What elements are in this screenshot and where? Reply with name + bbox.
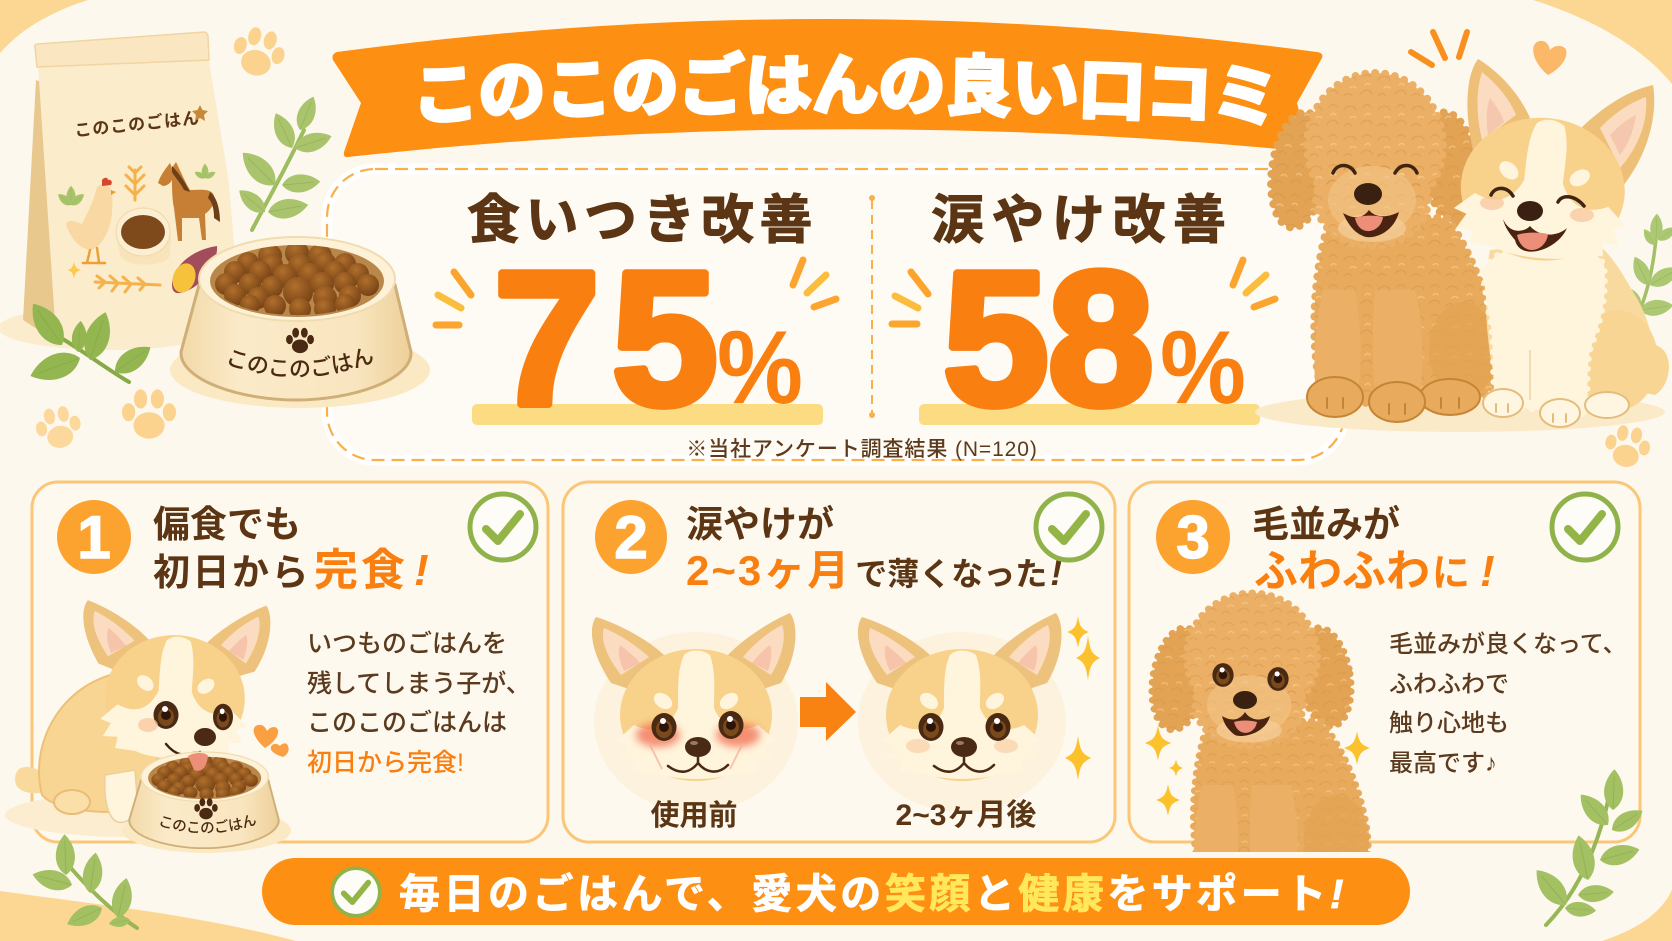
bowl label — [222, 360, 378, 377]
small bowl: このこのごはん — [160, 815, 256, 834]
title — [390, 109, 1300, 123]
sparks right — [793, 260, 836, 307]
body text: ふわふわで — [1389, 671, 1509, 698]
ground shadow — [1255, 392, 1665, 432]
card 3 — [1128, 480, 1642, 852]
icon: paw lower — [122, 389, 176, 439]
sparkles — [1065, 616, 1100, 780]
heading: に! — [1432, 547, 1495, 596]
body text: 触り心地も — [1389, 710, 1509, 737]
sparks left — [436, 272, 471, 325]
icon: bowl paw — [194, 798, 218, 819]
food bowl — [170, 236, 430, 408]
icon: check — [1036, 494, 1102, 560]
value: 5 — [612, 233, 718, 445]
leaf sprig bottom right — [1529, 769, 1647, 925]
heading: 毛並みが — [1252, 504, 1400, 545]
icon: check — [332, 868, 380, 916]
corner: top right — [1533, 0, 1672, 84]
heading: 偏食でも — [153, 504, 301, 545]
poodle hero — [1264, 73, 1497, 422]
banner — [332, 19, 1322, 158]
heading: appetite: 食いつき改善 — [467, 191, 818, 250]
icon: check — [1552, 494, 1618, 560]
body text: このこのごはんは — [307, 709, 507, 737]
icon: heart — [1533, 41, 1566, 75]
nose and mouth — [166, 728, 216, 769]
arrow — [800, 682, 856, 741]
food bag — [0, 32, 234, 350]
icon: hearts — [254, 725, 289, 757]
leaf sprig right edge — [1621, 213, 1672, 318]
face — [1212, 663, 1289, 736]
sparks — [1411, 32, 1467, 65]
tear stain — [636, 723, 760, 747]
chihuahua hero — [1449, 59, 1669, 427]
label: after: 2~3ヶ月後 — [896, 799, 1036, 832]
body text: いつものごはんを — [307, 630, 507, 658]
chihuahua eating — [5, 596, 271, 837]
body text: 毛並みが良くなって、 — [1389, 631, 1627, 658]
icon: chicken — [66, 178, 116, 263]
icon: bag sparkle — [67, 261, 81, 279]
number badge — [595, 500, 667, 574]
small bowl — [122, 751, 291, 853]
bowl label — [155, 823, 260, 833]
corner: bottom right — [1602, 890, 1672, 941]
icon: bowl paw — [286, 328, 314, 353]
ears — [1467, 59, 1654, 187]
icon: small bowl — [116, 208, 171, 265]
hero dogs — [1255, 32, 1669, 432]
underline — [919, 404, 1260, 425]
icon: paw right — [1602, 422, 1653, 471]
bowl tongue — [188, 753, 208, 771]
eyes — [154, 701, 178, 729]
after circle — [858, 632, 1066, 812]
number badge: 2 — [614, 504, 648, 571]
bag label: このこのごはん — [73, 107, 201, 141]
body text: 残してしまう子が、 — [307, 670, 531, 698]
body text: 最高です♪ — [1389, 750, 1497, 777]
icon: bag wheat top — [126, 167, 144, 200]
value: 7 — [494, 233, 600, 445]
number badge: 1 — [77, 504, 111, 571]
leaf sprig bottom left — [30, 834, 137, 932]
percent: % — [1160, 310, 1246, 426]
heading: 2~3ヶ月 — [686, 547, 851, 594]
card 2 — [563, 482, 1115, 842]
icon: bag leaf right — [193, 164, 217, 180]
corner: bottom left — [0, 891, 296, 941]
bottom banner — [262, 858, 1410, 925]
percent: % — [717, 310, 803, 426]
icon: check — [470, 494, 536, 560]
body text: 初日から完食! — [307, 749, 464, 777]
before dog face — [592, 613, 795, 781]
face — [1333, 166, 1417, 237]
face — [1480, 188, 1594, 252]
number badge — [57, 500, 131, 574]
underline — [472, 404, 823, 425]
icon: bag leaf left — [56, 186, 86, 208]
heading: tear stains: 涙やけ改善 — [931, 191, 1234, 250]
before circle — [594, 632, 798, 812]
corner: top left — [0, 0, 88, 53]
sparkles — [1145, 725, 1370, 816]
heading: ふわふわ — [1254, 547, 1430, 596]
label: before: 使用前 — [650, 799, 738, 832]
card 1 — [5, 480, 550, 853]
value: 8 — [1048, 233, 1154, 445]
icon: bag wheat bottom — [95, 276, 160, 292]
food bowl: このこのごはん — [229, 348, 373, 378]
icon: horse — [158, 162, 220, 241]
icon: sweet potato — [169, 246, 217, 296]
heading: 涙やけが — [686, 504, 834, 545]
sparks left — [892, 272, 928, 324]
poodle — [1148, 590, 1372, 852]
number badge: 3 — [1176, 504, 1210, 571]
stat: appetite — [436, 191, 836, 445]
banner text: 毎日のごはんで、愛犬の — [399, 871, 885, 917]
leaf sprig top — [234, 93, 334, 230]
divider — [869, 195, 875, 418]
heading: で薄くなった! — [855, 552, 1062, 593]
icon: paw top — [228, 23, 290, 82]
heading: 完食! — [314, 546, 429, 595]
icon: star — [192, 105, 208, 121]
sparks right — [1233, 260, 1275, 307]
number badge — [1156, 500, 1230, 574]
footnote: ※当社アンケート調査結果 (N=120) — [686, 438, 1038, 461]
after dog face — [858, 613, 1061, 781]
banner: このこのごはんの良い口コミ — [420, 49, 1271, 126]
blush — [138, 718, 158, 732]
leaf sprig lower left — [23, 297, 156, 388]
stat: tear stains — [892, 191, 1275, 445]
heading: 初日から — [153, 552, 311, 593]
banner text: 笑顔と健康をサポート! — [885, 871, 1347, 917]
stats panel — [327, 169, 1345, 461]
value: 5 — [943, 233, 1049, 445]
icon: paw lower left — [33, 403, 84, 452]
